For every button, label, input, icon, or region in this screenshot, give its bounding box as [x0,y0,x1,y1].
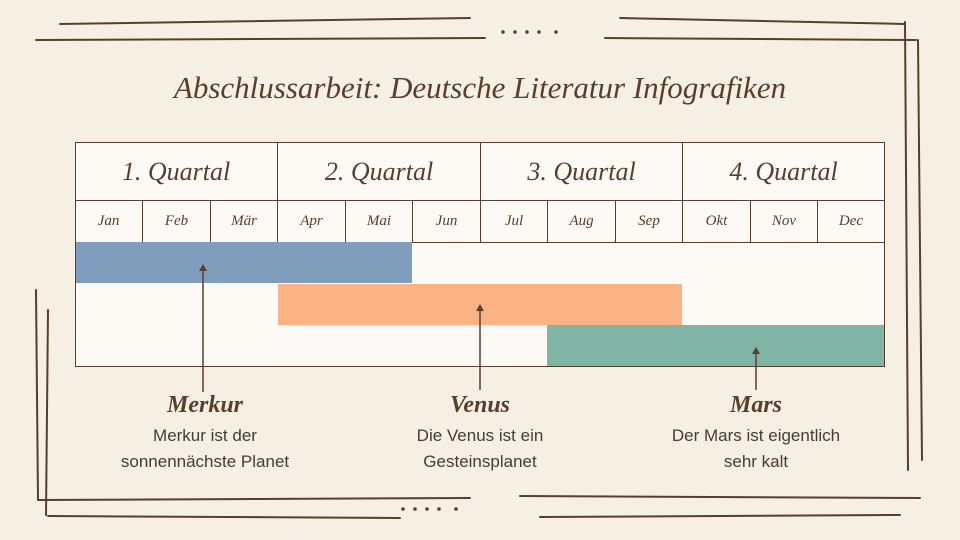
label: Mars: sehr kalt [724,452,788,471]
label: Venus: Venus [450,392,510,418]
bar: Mars [547,325,884,366]
month headers: Jan [98,213,119,229]
gantt chart: Apr [300,213,323,229]
label: Merkur: Merkur ist der [153,426,257,445]
gantt chart: Feb [165,213,188,229]
gantt chart [75,142,885,367]
gantt chart: Jul [505,213,523,229]
label: Merkur [121,392,289,471]
label: Merkur: sonnennächste Planet [121,452,289,471]
gantt chart: Mai [367,213,391,229]
label: Mars [672,392,840,471]
title: Abschlussarbeit: Deutsche Literatur Infografiken [174,70,786,105]
gantt chart: Mär [231,213,257,229]
bar: Merkur [76,242,412,283]
gantt chart: Sep [638,213,660,229]
quarter headers: 1. Quartal [122,156,230,186]
gantt chart: 2. Quartal [325,156,433,186]
label: Venus: Gesteinsplanet [423,452,537,471]
label: Mars: Der Mars ist eigentlich [672,426,840,445]
gantt chart: Nov [772,213,796,229]
gantt chart: Aug [569,213,594,229]
gantt chart: Okt [706,213,727,229]
label: Venus: Die Venus ist ein [417,426,543,445]
label: Mars: Mars [730,392,782,418]
bar: Venus [278,284,682,325]
gantt chart: Dec [839,213,863,229]
label: Merkur: Merkur [167,392,243,418]
gantt chart: Jun [436,213,457,229]
gantt chart: 3. Quartal [527,156,636,186]
label: Venus [417,392,543,471]
gantt chart: 4. Quartal [729,156,838,186]
